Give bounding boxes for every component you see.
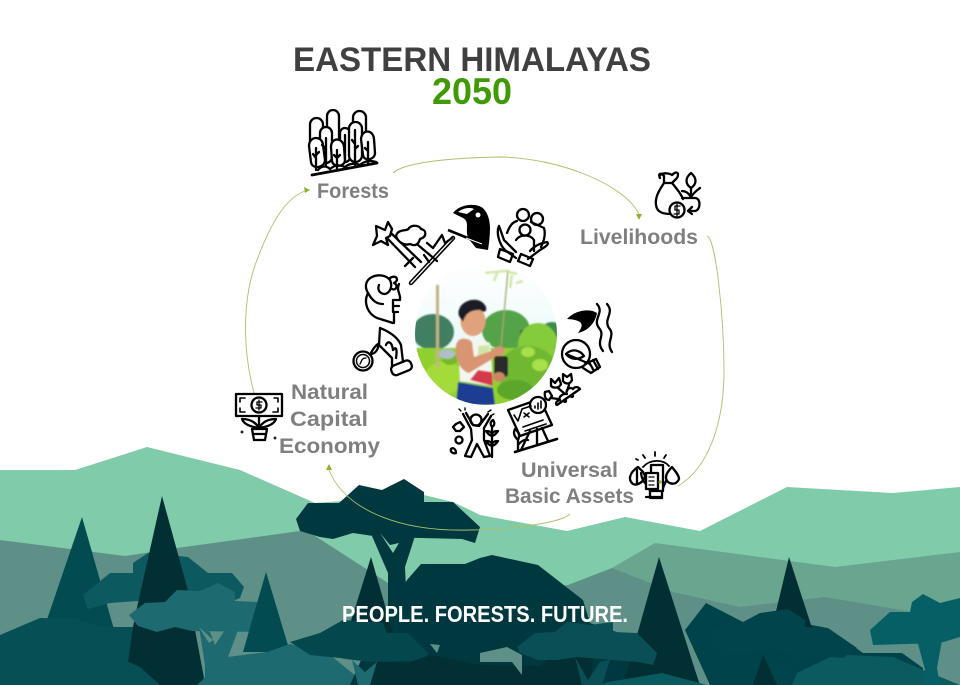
photo: sapling stem [501,270,508,347]
photo: distant figure [439,349,455,359]
forest: right dark cone [623,557,700,685]
icon: leaf and heat waves [567,304,612,352]
icon: light bulb with leaf [562,340,600,373]
forest: central tree crown [290,620,428,665]
label: universal basic assets: Universal [521,458,618,482]
forest: front left tree crown [129,583,281,636]
photo: bamboo post [436,285,439,367]
forest: lower left hill [38,655,160,685]
photo: child shirt [458,336,493,386]
forest: teal hill [197,644,367,685]
forest: grey gaps [430,644,440,653]
forest: big acacia crown [296,479,480,543]
landscape background [0,447,960,685]
forest: centre right tree trunk [575,657,610,685]
icon: bulb with city, leaf and drop [630,452,679,498]
forest: edge tree trunk [917,625,952,685]
photo: plant pot [494,356,508,377]
photo: sapling leaves [485,271,523,288]
label: natural capital economy: Capital [290,407,368,431]
photo: child holding sapling [415,268,557,405]
icon: presentation board [508,397,557,452]
forest: teal right hill [792,655,960,685]
label: forests: Forests [317,179,389,203]
photo: child hair [459,300,486,322]
forest: left hill [0,618,133,685]
forest: centre right tree crown [517,622,657,665]
icon: tulips and cloud [545,374,580,405]
forest: mid tree trunk [199,625,240,685]
forest: central trunk [352,660,377,685]
arrow: livelihoods to universal basic assets [678,236,724,486]
mid green ridge [560,543,960,685]
forest: dark foreground lumps [370,650,594,685]
forest: mid left tree crown [83,553,244,609]
arrow: universal basic assets to natural capital economy [326,464,570,530]
forest: edge tree crown [870,594,960,645]
forest: right thin cone [772,557,812,628]
icon: rainforest tilted [373,222,453,283]
tagline: PEOPLE. FORESTS. FUTURE. [342,601,628,627]
forest: small cone [243,572,290,652]
photo: background trees [412,314,454,350]
forest: big acacia trunk [372,536,415,610]
icon: celebrating person with plant [451,408,498,457]
icon: elephant [366,275,400,323]
arrow: natural capital economy to forests [246,187,310,393]
label: natural capital economy: Natural [291,380,368,404]
icon: forest trees [309,110,377,175]
photo: child head [460,306,486,336]
connector dot on bulb icon [658,480,662,484]
icon: money bag and plant [656,173,700,218]
label: natural capital economy: Economy [279,434,380,458]
photo sky [416,298,556,405]
photo: child shorts [456,382,495,405]
arrow: forests to livelihoods [393,157,642,220]
icon: family in hands [498,209,548,266]
forest: bottom teal hill [600,673,707,685]
forest: dark central hill [350,555,640,685]
label: natural capital economy [279,380,380,458]
photo: green field [416,346,516,405]
icon: hand holding coin [354,328,413,376]
label: universal basic assets [505,458,634,508]
forest: right tree crown trunk [770,650,800,685]
forest: right tree crown [705,609,857,658]
label: livelihoods: Livelihoods [580,225,698,249]
icon: toucan [448,205,490,250]
forest: tall dark cone [120,496,204,685]
forest: small dark cone front [753,655,777,685]
icon: banknote plant [236,394,282,440]
forest: grey patch centre-right [480,647,522,675]
forest: acacia notch [380,533,399,553]
forest: central cone [345,557,395,640]
photo: child hands [493,346,505,356]
label: universal basic assets: Basic Assets [505,484,634,508]
title line: Eastern Himalayas: EASTERN HIMALAYAS [293,41,651,79]
photo: child arm [456,339,499,373]
title [293,41,651,112]
light green mountains [0,447,960,685]
grey teal ridge [0,531,960,685]
forest: left cone [40,517,117,640]
title year: 2050 [432,71,512,112]
forest: grey notch [199,627,213,643]
forest: right ridge hill [685,603,923,685]
